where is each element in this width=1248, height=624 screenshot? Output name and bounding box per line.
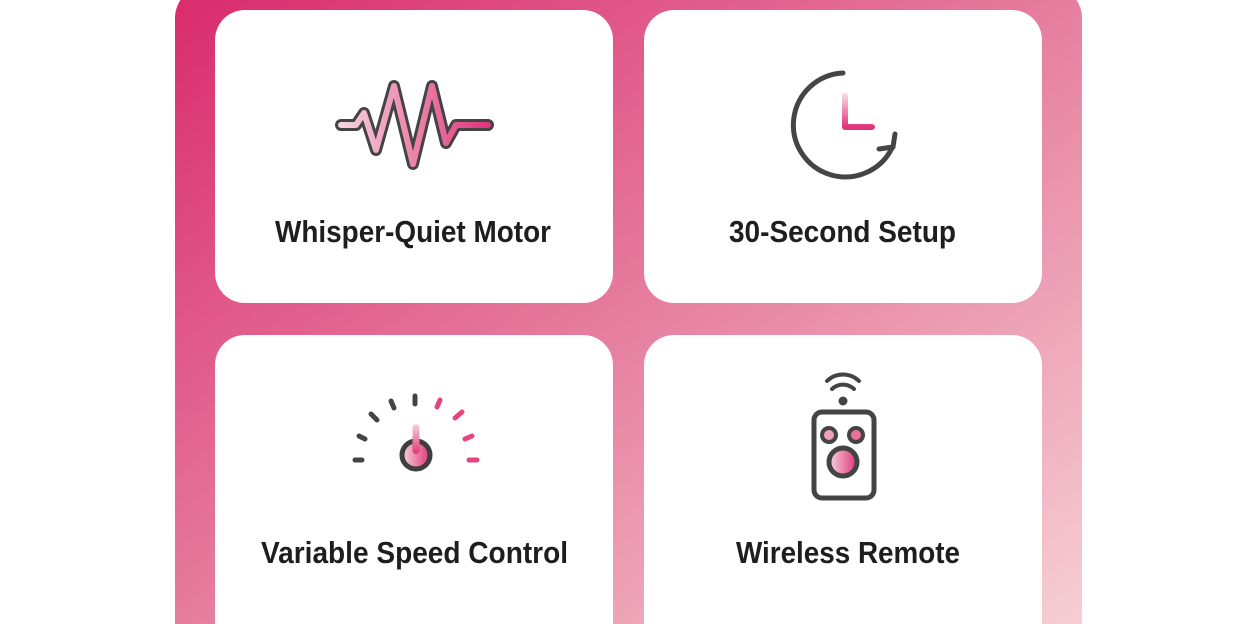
card: 30-second setup [644,10,1042,303]
card: wireless remote [644,335,1042,624]
card: whisper-quiet motor [215,10,613,303]
icon: sound wave [341,86,488,164]
icon: gauge [355,396,477,469]
label: Wireless Remote [736,535,960,570]
label: 30-Second Setup [729,214,956,249]
label: Whisper-Quiet Motor [275,214,551,249]
icon: clock with arrow [793,73,895,177]
background panel [175,0,1082,624]
card: variable speed control [215,335,613,624]
label: Variable Speed Control [261,535,568,570]
icon: remote [814,375,874,498]
